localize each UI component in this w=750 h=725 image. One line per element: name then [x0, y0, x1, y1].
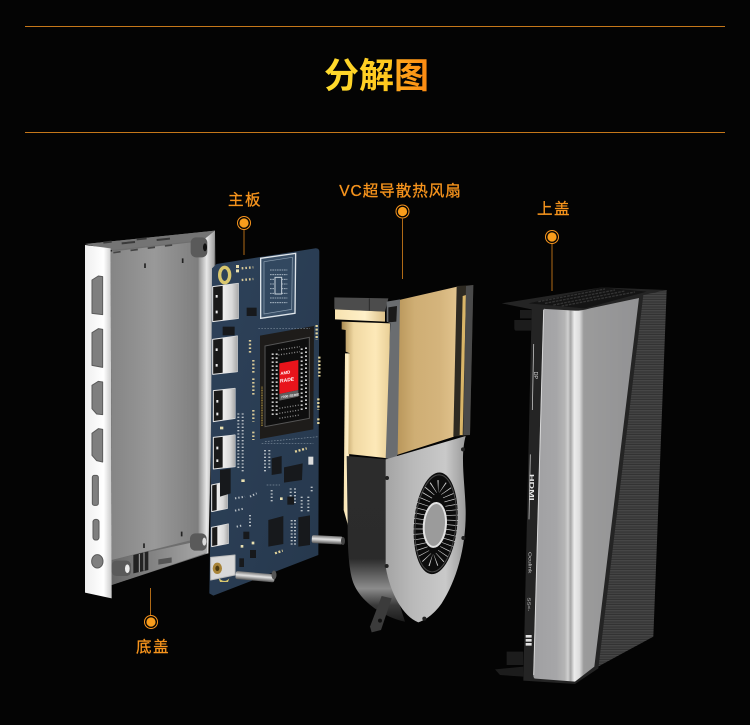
title: 分解图: [324, 57, 429, 96]
thin left gold strip: [344, 353, 350, 527]
small components: [235, 267, 319, 553]
black frame: [502, 287, 667, 684]
part: top cover: Oculink: [527, 552, 532, 574]
impeller: [410, 471, 462, 576]
callout: 上盖: 上盖: [537, 200, 571, 218]
part: top cover: [495, 287, 667, 684]
headers: [220, 265, 283, 548]
scroll housing: [347, 456, 405, 622]
part: motherboard: [209, 248, 319, 596]
connector pins: [214, 295, 220, 462]
left vapour chamber: [342, 322, 390, 458]
power jack: [213, 563, 222, 574]
mounting ring: [220, 267, 230, 283]
silver face: [533, 298, 639, 682]
screw: lower left: [235, 570, 276, 582]
callout: VC超导散热风扇: [339, 182, 462, 279]
part: bottom cover: [85, 231, 216, 598]
mounting tab: [370, 596, 392, 632]
part: heat-sink fan: [334, 285, 473, 632]
memory block: [261, 253, 296, 318]
processor: AMD: [280, 369, 290, 376]
back wall: [85, 231, 216, 585]
top rule: [25, 26, 725, 27]
port cut-outs: [92, 276, 103, 568]
top cap: [334, 297, 388, 312]
processor: [260, 326, 314, 439]
part: top cover: DP: [532, 372, 538, 380]
top lip: [85, 231, 215, 250]
callout: 主板: 主板: [228, 191, 262, 209]
top vents: [528, 287, 647, 308]
mesh side: [597, 290, 667, 667]
callout: VC超导散热风扇: VC超导散热风扇: [339, 182, 462, 200]
fan plate: [386, 436, 466, 622]
callout: 底盖: 底盖: [136, 638, 170, 656]
gray pillar: [386, 299, 400, 459]
chips: [220, 308, 310, 567]
callout: 底盖: [136, 588, 170, 656]
right gold face: [397, 287, 457, 455]
port markings: [529, 344, 534, 519]
connectors: [211, 283, 238, 580]
processor: 7000 SERIE: [281, 392, 300, 399]
part: top cover: SS<-: [527, 597, 532, 612]
standoffs: [112, 237, 207, 576]
processor: RADE: [280, 376, 295, 385]
tabs: [495, 310, 532, 677]
clip: [133, 551, 148, 573]
callout: 上盖: [537, 200, 571, 291]
part: top cover: HDMI: [528, 474, 535, 501]
callout: 主板: [228, 191, 262, 255]
bottom lip: [112, 539, 207, 585]
front white strip: [85, 245, 112, 598]
dark rail: [453, 285, 473, 437]
right flange: [198, 231, 215, 553]
connector shells: [217, 283, 238, 546]
pcb: [209, 248, 319, 596]
screws: [385, 447, 465, 621]
bottom rule: [25, 132, 725, 133]
screw: right: [312, 535, 345, 545]
inner panel: [111, 242, 198, 560]
